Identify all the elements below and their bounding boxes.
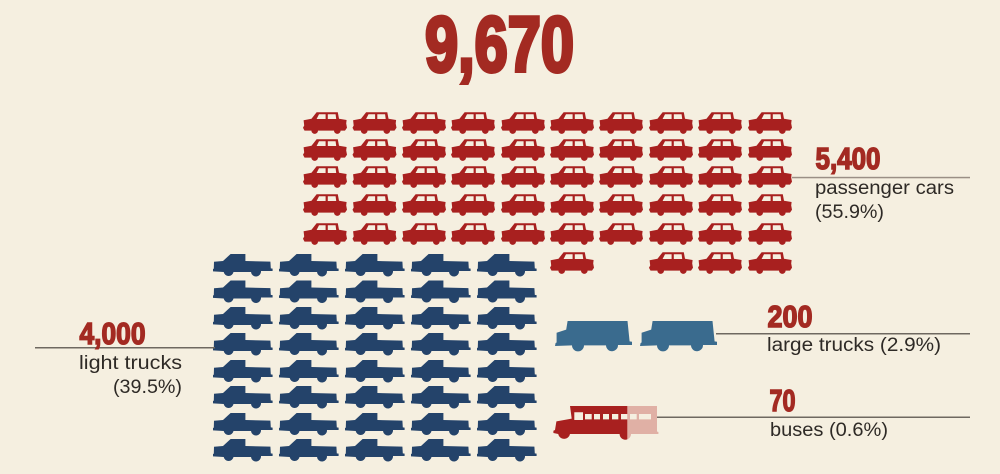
callout: passenger cars — [792, 141, 970, 223]
callout: large trucks: large trucks (2.9%) — [767, 335, 941, 356]
callout: light trucks: light trucks — [79, 353, 182, 374]
callout: passenger cars: (55.9%) — [815, 202, 884, 223]
panel: passenger cars icon grid — [303, 112, 792, 274]
callout: passenger cars: 5,400 — [816, 141, 880, 176]
callout: large trucks — [716, 299, 970, 356]
callout: buses — [657, 383, 970, 441]
icon: large trucks — [555, 321, 717, 351]
callout: large trucks: 200 — [768, 299, 812, 334]
callout: light trucks: (39.5%) — [113, 377, 182, 398]
callout: buses: buses (0.6%) — [770, 420, 888, 441]
callout: buses: 70 — [770, 383, 796, 418]
callout: light trucks: 4,000 — [80, 316, 146, 351]
icon: partially filled school bus — [553, 406, 658, 440]
callout: light trucks — [35, 316, 215, 398]
panel: light trucks icon grid — [213, 254, 537, 462]
title: total vehicles: 9,670 — [425, 0, 574, 88]
callout: passenger cars: passenger cars — [815, 178, 954, 199]
